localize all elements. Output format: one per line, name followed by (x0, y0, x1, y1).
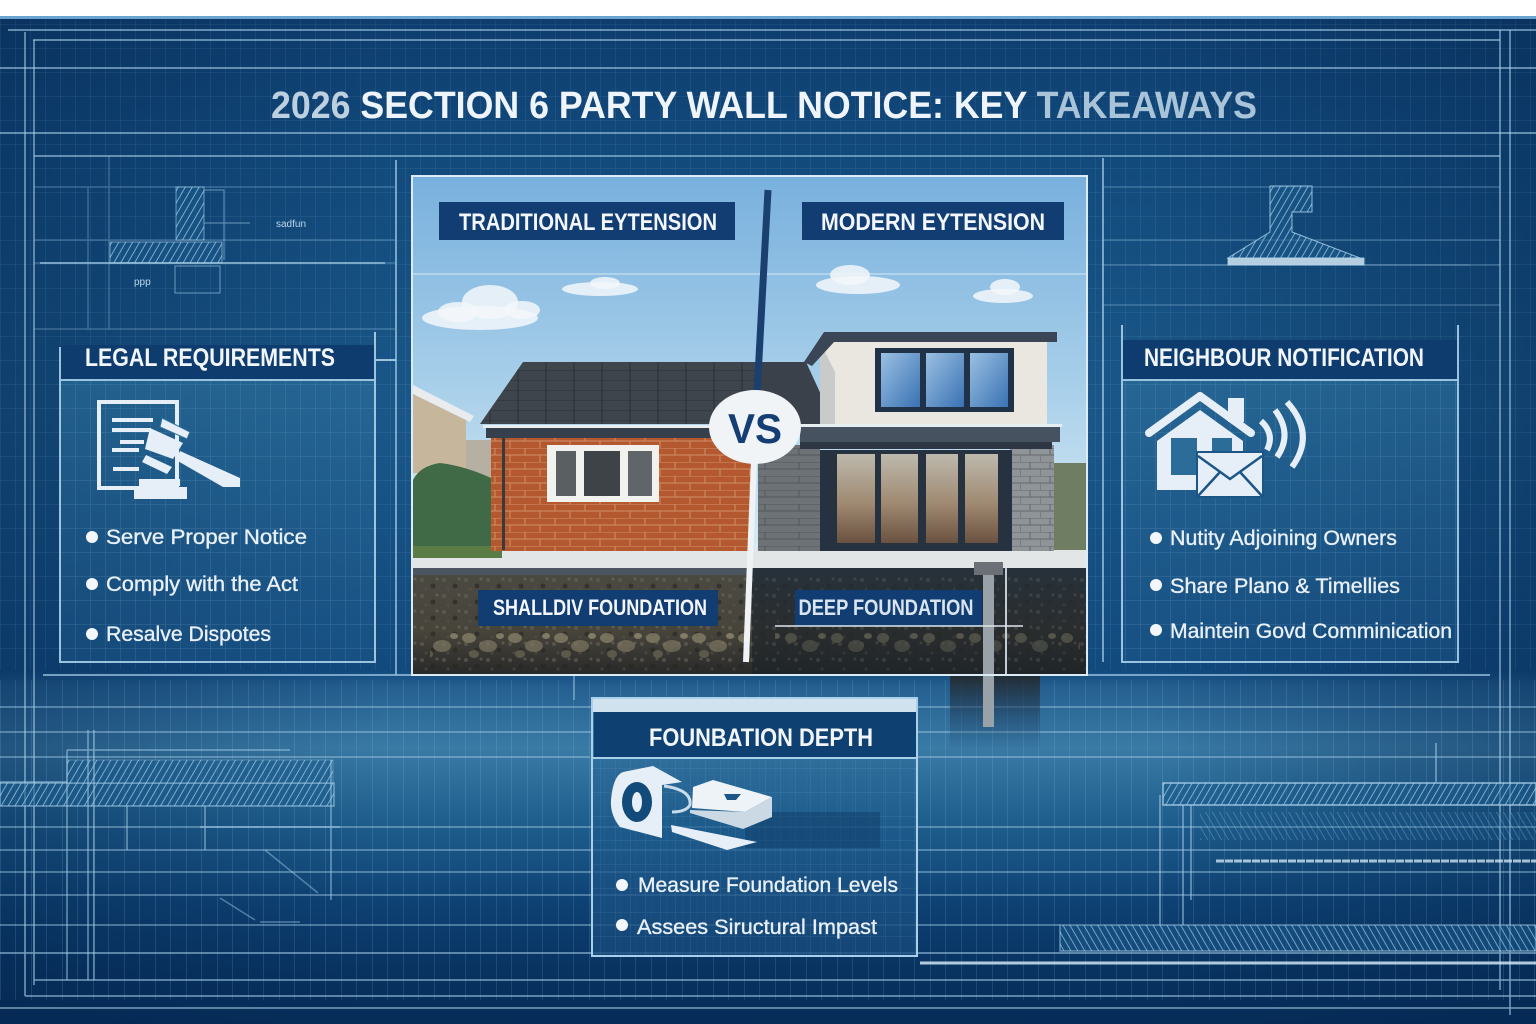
soil texture: right (752, 575, 1087, 673)
label: traditional extension (439, 202, 735, 240)
icon: house with envelope and signal (1149, 396, 1303, 497)
comparison illustration (412, 176, 1087, 753)
blueprint sketch: top right roof detail (1150, 186, 1470, 265)
soil: right (752, 568, 1087, 674)
blueprint sketch: top left detail: ppp (134, 277, 151, 288)
slab (412, 550, 1087, 568)
label: shallow foundation (478, 590, 718, 626)
heading: neighbour notification: NEIGHBOUR NOTIFICATION (1144, 344, 1424, 372)
bullet list: foundation (616, 874, 898, 939)
soil lumps: right (775, 630, 1080, 662)
badge: VS: VS (728, 405, 782, 452)
foundation ledge (412, 568, 752, 575)
icon: tape measure and plans (611, 766, 772, 850)
panel: legal requirements (60, 332, 396, 662)
panel: neighbour notification (1122, 325, 1458, 662)
traditional house (480, 362, 770, 551)
soil lumps: left (430, 630, 750, 662)
heading: legal requirements: LEGAL REQUIREMENTS (85, 344, 335, 372)
bullet list: legal: Serve Proper Notice (106, 526, 307, 549)
bullet list: neighbour: Share Plano & Timellies (1170, 575, 1400, 598)
icon: document and gavel (99, 402, 240, 499)
blueprint sketch: lower right section (920, 743, 1536, 963)
badge: VS (709, 390, 801, 464)
bullet list: legal (86, 526, 307, 646)
bullet list: legal: Comply with the Act (106, 573, 298, 596)
bullet list: neighbour: Nutity Adjoining Owners (1170, 527, 1397, 550)
sky (412, 176, 1087, 566)
label: deep foundation: DEEP FOUNDATION (798, 595, 974, 620)
blueprint sketch: top left detail (40, 187, 385, 293)
bullet list: legal: Resalve Dispotes (106, 623, 271, 646)
blueprint sketch: lower left section (0, 730, 340, 980)
label: modern extension (802, 202, 1064, 240)
bullet list: foundation: Measure Foundation Levels (638, 874, 898, 897)
title: 2026 SECTION 6 PARTY WALL NOTICE: KEY TAKEAWAYS (271, 85, 1257, 127)
soil texture: left (412, 575, 752, 673)
soil: left (412, 568, 752, 674)
bullet list: neighbour: Maintein Govd Comminication (1170, 620, 1452, 643)
foundation pile (950, 562, 1040, 753)
neighbouring house and hedge (413, 387, 474, 473)
modern house (757, 332, 1062, 551)
heading: foundation depth: FOUNBATION DEPTH (649, 724, 873, 752)
bullet list: foundation: Assees Siructural Impast (637, 916, 877, 939)
blueprint sketch: top left detail: sadfun (276, 219, 306, 230)
background right (1050, 463, 1087, 553)
label: deep foundation (775, 590, 1023, 626)
label: shallow foundation: SHALLDIV FOUNDATION (493, 595, 707, 620)
divider pole (757, 190, 768, 395)
bullet list: neighbour (1150, 527, 1452, 643)
clouds (422, 265, 1033, 330)
soil smudge (745, 812, 880, 848)
label: modern extension: MODERN EYTENSION (821, 209, 1045, 236)
panel: foundation depth (591, 698, 918, 956)
label: traditional extension: TRADITIONAL EYTENSION (459, 209, 717, 236)
